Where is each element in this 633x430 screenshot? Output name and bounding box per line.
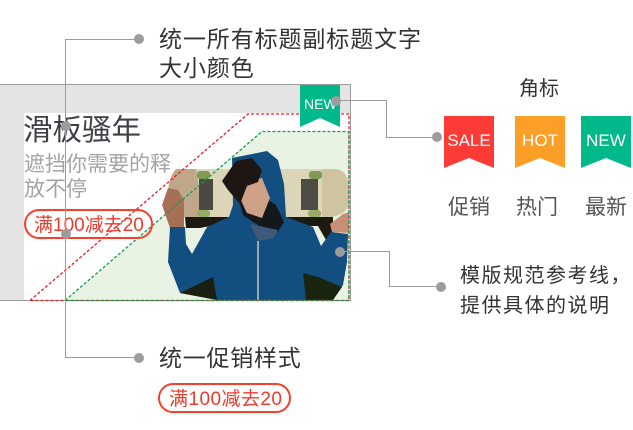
callout leader: title style bbox=[61, 34, 144, 363]
callout leader: guideline bbox=[335, 247, 446, 292]
product photo: skater with board bbox=[162, 151, 349, 300]
green safe area fill bbox=[65, 131, 349, 301]
heading: banner title: 滑板骚年 bbox=[23, 114, 141, 147]
ribbon: NEW in banner: NEW bbox=[304, 96, 337, 112]
promo pill sample bbox=[159, 384, 290, 412]
ribbon: HOT bbox=[515, 116, 565, 168]
text block: guideline note: 提供具体的说明 bbox=[460, 294, 610, 317]
text block: title style note: 大小颜色 bbox=[159, 55, 255, 81]
text block: title style note: 统一所有标题副标题文字 bbox=[159, 26, 422, 52]
label: hot: 热门 bbox=[516, 196, 558, 219]
panel: banner template bbox=[0, 84, 350, 301]
callout leader: ribbon bbox=[331, 96, 442, 142]
ribbon: NEW: NEW bbox=[586, 131, 626, 150]
promo pill in banner bbox=[25, 210, 152, 238]
text block: guideline note: 模版规范参考线， bbox=[460, 264, 632, 287]
ribbon: SALE bbox=[444, 116, 494, 168]
text block: promo style note: 统一促销样式 bbox=[159, 345, 302, 371]
text block: banner subtitle: 遮挡你需要的释 bbox=[24, 153, 171, 176]
green dashed guideline bbox=[65, 132, 349, 300]
ribbon: NEW in banner bbox=[300, 85, 340, 127]
ribbon: HOT: HOT bbox=[522, 131, 558, 150]
ribbon: SALE: SALE bbox=[447, 131, 491, 150]
frame lines bbox=[0, 84, 350, 300]
promo pill in banner: 满100减去20 bbox=[34, 214, 144, 236]
label: promotion: 促销 bbox=[448, 196, 490, 219]
label: newest: 最新 bbox=[585, 196, 627, 219]
red dashed guideline bbox=[30, 114, 349, 300]
ribbon: NEW bbox=[581, 116, 631, 168]
text block: banner subtitle: 放不停 bbox=[24, 178, 87, 201]
promo pill sample: 满100减去20 bbox=[169, 388, 282, 410]
heading: ribbon legend: 角标 bbox=[519, 77, 559, 100]
